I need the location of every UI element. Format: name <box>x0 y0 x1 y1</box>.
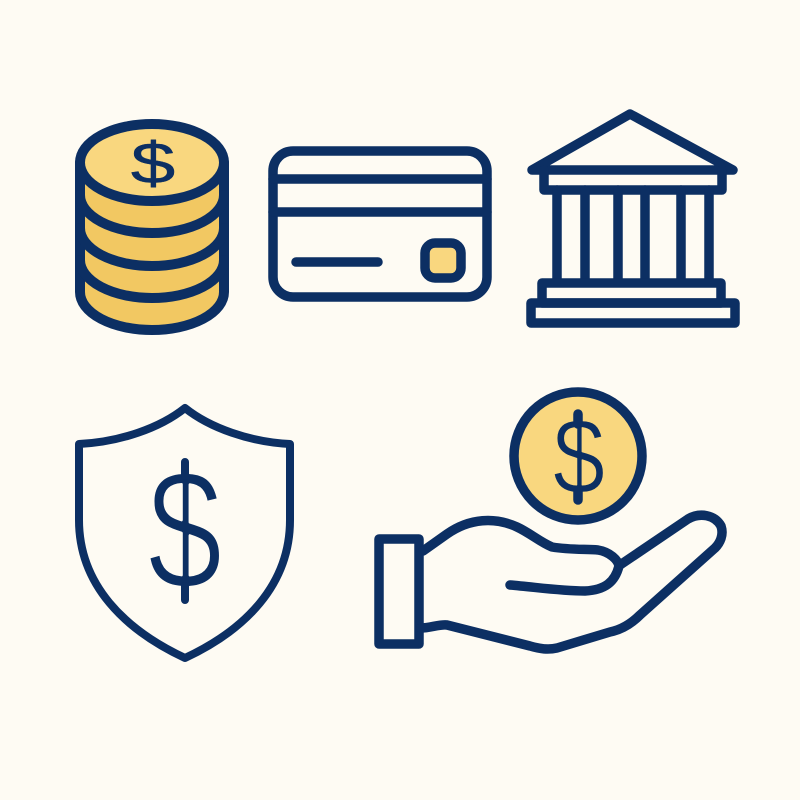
hand outline <box>423 521 619 591</box>
icon: shield with dollar <box>79 408 290 658</box>
icon: bank building <box>531 114 735 323</box>
icon: credit card <box>273 151 487 297</box>
card chip <box>425 243 461 278</box>
dollar sign on coin: $ <box>131 131 175 195</box>
coin <box>514 392 642 520</box>
dollar sign on coin above hand: $ <box>553 395 605 518</box>
dollar sign on shield: $ <box>148 433 222 626</box>
icon: stack of coins <box>80 124 224 330</box>
cuff <box>379 539 419 644</box>
icon: hand holding coin <box>379 392 722 649</box>
